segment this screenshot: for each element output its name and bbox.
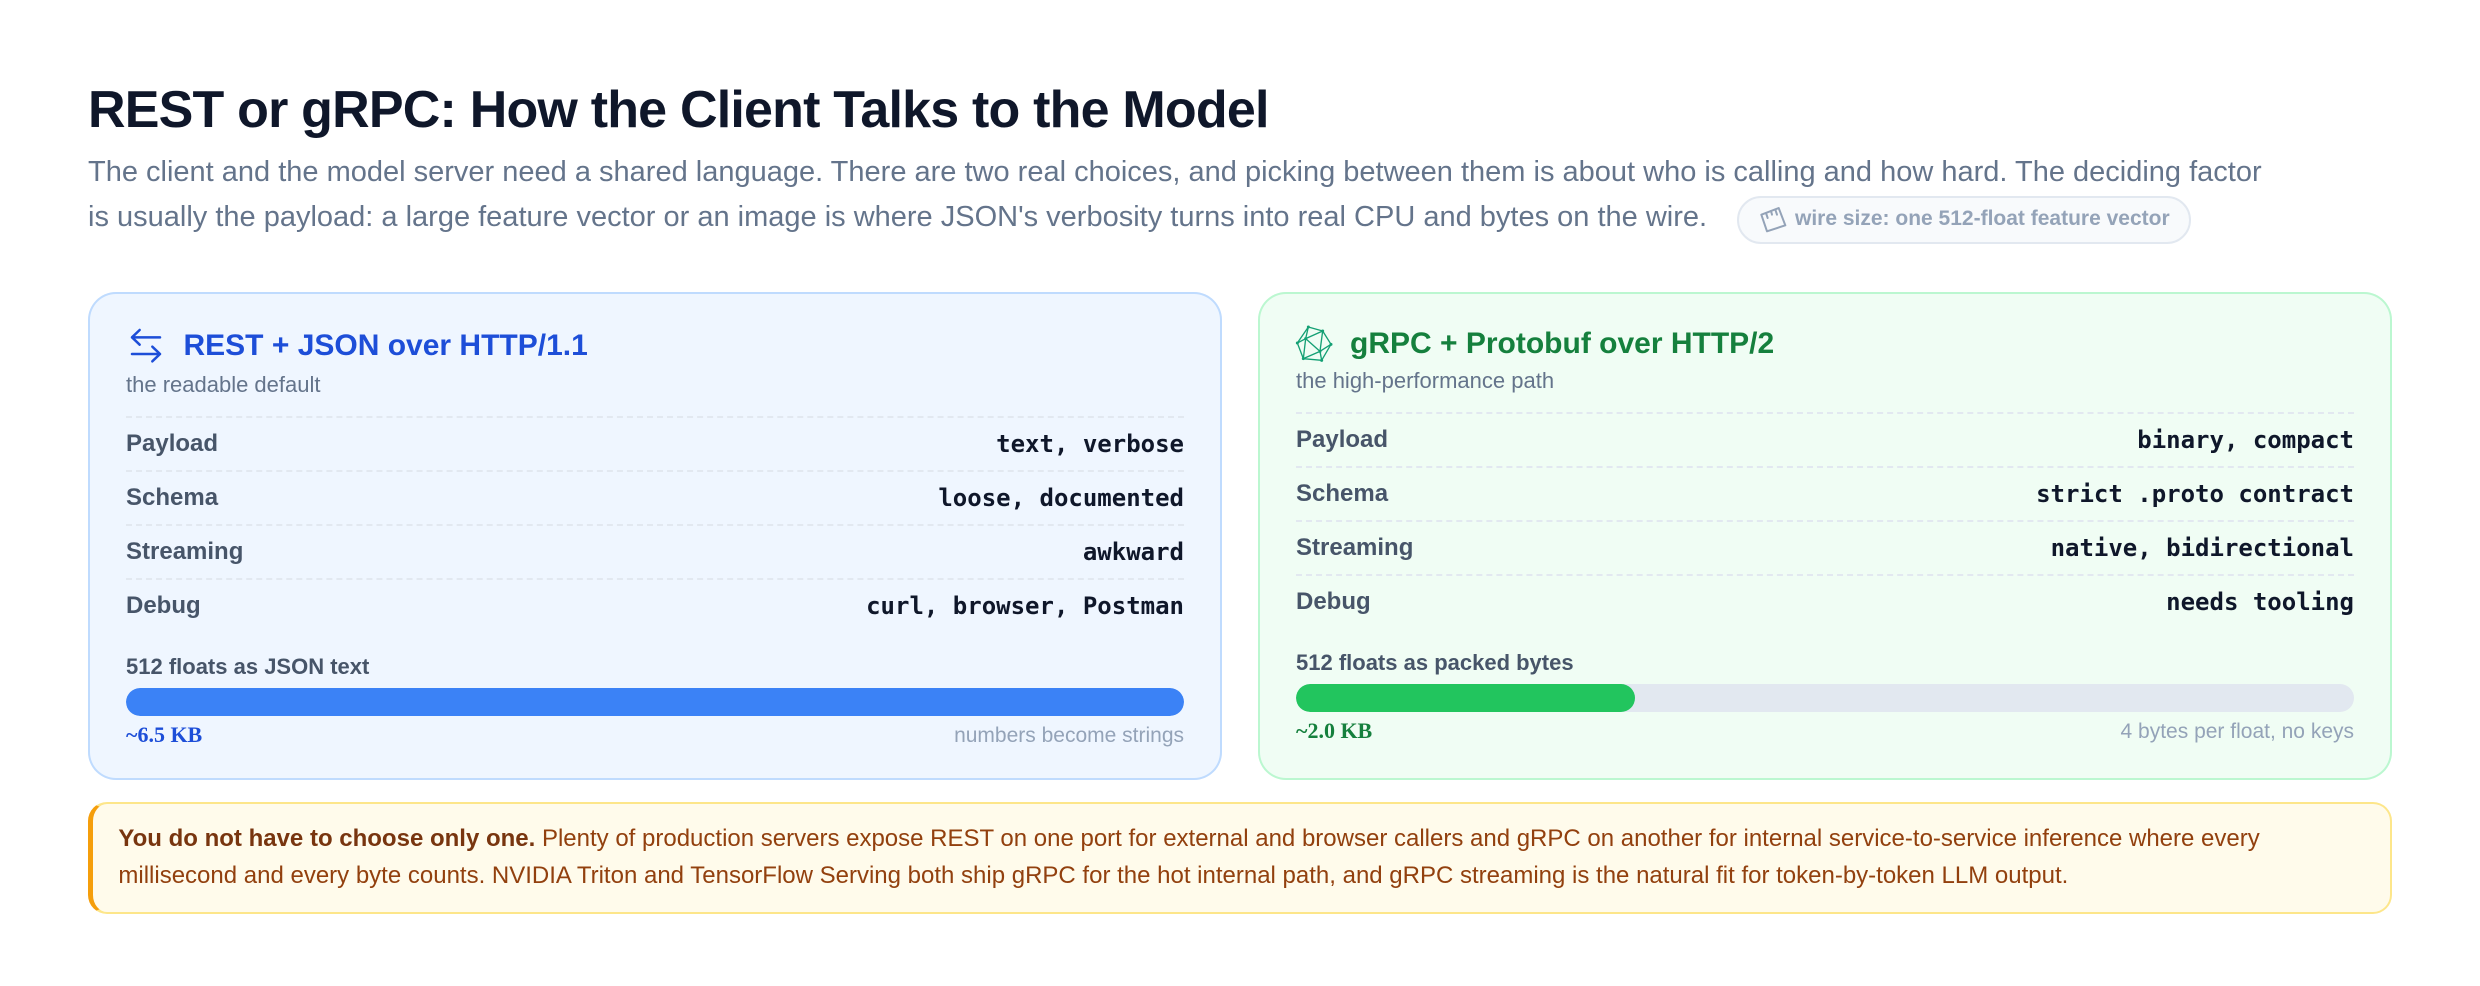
REST subtitle: the readable default	[126, 372, 320, 396]
intro paragraph: is usually the payload: a large feature vector or an image is where JSON's verbosity turns into real CPU and bytes on the wire.	[88, 201, 1707, 233]
callout line 2: millisecond and every byte counts. NVIDIA Triton and TensorFlow Serving both ship gRPC for the hot internal path, and gRPC streaming is the natural fit for token-by-token LLM output.	[118, 862, 2068, 889]
bar: protobuf size	[1296, 684, 2354, 712]
row: streaming label: Streaming	[1296, 534, 1413, 561]
panel: gRPC + Protobuf	[1258, 292, 2392, 780]
row: payload value: text, verbose	[996, 430, 1184, 458]
row: debug label: Debug	[126, 592, 201, 619]
row: debug label: Debug	[1296, 588, 1371, 615]
row: payload label: Payload	[1296, 426, 1388, 453]
callout line 1: You do not have to choose only one. Plenty of production servers expose REST on one port for external and browser callers and gRPC on another for internal service-to-service inference where every	[118, 825, 2260, 852]
bar value: ~6.5 KB	[126, 722, 202, 747]
panel: REST + JSON	[88, 292, 1222, 780]
row: debug value: needs tooling	[2166, 588, 2354, 616]
row: schema label: Schema	[126, 484, 218, 511]
row: schema value: strict .proto contract	[2036, 480, 2354, 508]
row: payload value: binary, compact	[2137, 426, 2354, 454]
title: REST or gRPC: How the Client Talks to the Model	[88, 81, 1269, 139]
row: payload label: Payload	[126, 430, 218, 457]
icon: opposing arrows	[130, 328, 162, 363]
row: streaming value: awkward	[1083, 538, 1184, 566]
intro paragraph	[88, 156, 2262, 233]
row: schema label: Schema	[1296, 480, 1388, 507]
callout: use both	[88, 802, 2392, 914]
bar: JSON size	[126, 688, 1184, 716]
row: streaming value: native, bidirectional	[2051, 534, 2354, 562]
REST heading: REST + JSON over HTTP/1.1	[184, 329, 588, 362]
pill label: wire size: one 512-float feature vector	[1795, 207, 2170, 230]
bar label: 512 floats as packed bytes	[1296, 650, 1574, 675]
gRPC heading: gRPC + Protobuf over HTTP/2	[1350, 327, 1774, 360]
pill: wire size note	[1737, 196, 2191, 244]
bar note: 4 bytes per float, no keys	[2121, 720, 2354, 743]
bar label: 512 floats as JSON text	[126, 654, 369, 679]
row: schema value: loose, documented	[938, 484, 1184, 512]
intro paragraph: The client and the model server need a shared language. There are two real choices, and picking between them is about who is calling and how hard. The deciding factor	[88, 156, 2262, 188]
row: debug value: curl, browser, Postman	[866, 592, 1184, 620]
icon: polyhedron network	[1296, 326, 1332, 362]
bar note: numbers become strings	[954, 724, 1184, 747]
row: streaming label: Streaming	[126, 538, 243, 565]
bar value: ~2.0 KB	[1296, 718, 1372, 743]
icon: ruler	[1760, 207, 1786, 232]
gRPC subtitle: the high-performance path	[1296, 368, 1554, 392]
